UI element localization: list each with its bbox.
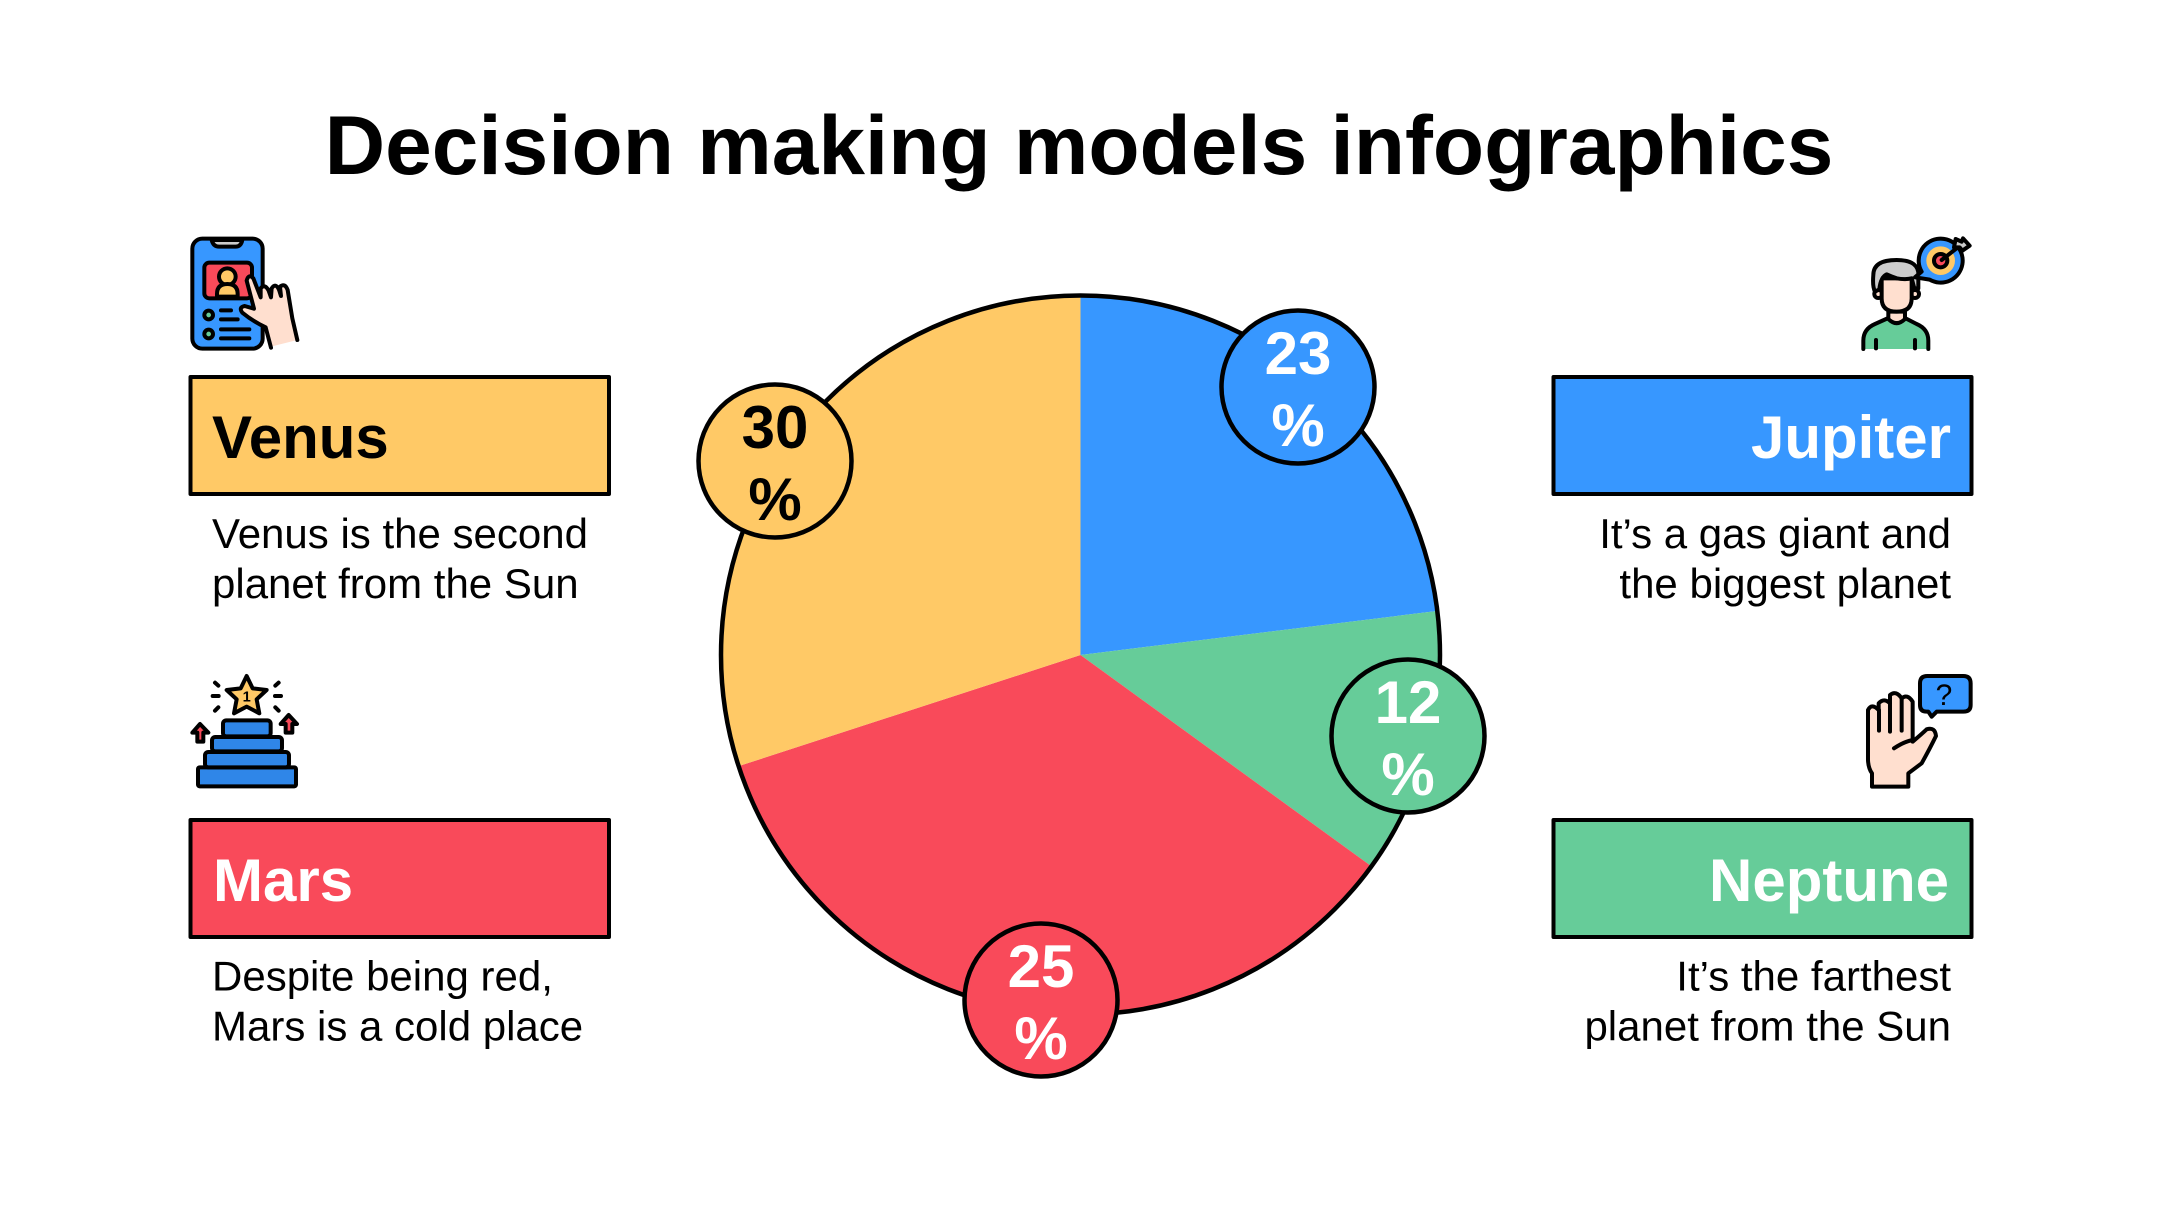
icon: phone with tapping hand (192, 239, 297, 349)
Mars description: Mars is a cold place (212, 1002, 583, 1050)
badge: 23% (1222, 310, 1374, 464)
badge: 25% (964, 924, 1118, 1076)
Jupiter description: the biggest planet (1619, 560, 1951, 607)
Jupiter heading box: Jupiter (1751, 404, 1951, 471)
badge: 23%: % (1271, 392, 1325, 459)
Jupiter heading box (1554, 377, 1972, 494)
Venus heading box (190, 377, 609, 494)
slice: blue 23% (1080, 296, 1437, 655)
badge: 12% (1332, 660, 1484, 812)
Neptune description: It’s the farthest (1676, 952, 1951, 1000)
badge: 30%: 30 (742, 394, 808, 461)
badge: 12%: 12 (1375, 669, 1441, 736)
icon: raised hand with question bubble: ? (1936, 679, 1952, 712)
Jupiter description: It’s a gas giant and (1599, 510, 1951, 557)
badge: 25%: 25 (1008, 933, 1074, 1000)
panel: Neptune (1554, 820, 1972, 1050)
Venus description: Venus is the second (212, 510, 588, 557)
icon: podium with star: 1 (243, 690, 251, 706)
slice: yellow 30% (721, 296, 1080, 766)
pie outline (721, 296, 1440, 1014)
badge: 25%: % (1014, 1005, 1068, 1072)
icon: raised hand with question bubble (1868, 676, 1971, 787)
panel: Venus (190, 377, 609, 607)
title: Decision making models infographics (325, 98, 1833, 192)
Neptune heading box: Neptune (1709, 847, 1949, 914)
Mars heading box (190, 820, 609, 937)
badge: 23%: 23 (1265, 320, 1331, 387)
badge: 30%: % (748, 466, 802, 533)
Neptune description: planet from the Sun (1584, 1002, 1951, 1050)
slice: green 12% (1080, 611, 1440, 866)
Mars heading box: Mars (213, 847, 353, 914)
Venus description: planet from the Sun (212, 560, 579, 607)
pie chart (721, 296, 1440, 1014)
badge: 12%: % (1381, 741, 1435, 808)
icon: person thinking of target (1863, 238, 1970, 349)
Mars description: Despite being red, (212, 952, 553, 1000)
panel: Jupiter (1554, 377, 1972, 607)
Venus heading box: Venus (212, 404, 389, 471)
slice: red 35% (739, 655, 1371, 1014)
badge: 30% (698, 384, 852, 538)
icon: podium with star (192, 676, 297, 786)
Neptune heading box (1554, 820, 1972, 937)
panel: Mars (190, 820, 609, 1050)
